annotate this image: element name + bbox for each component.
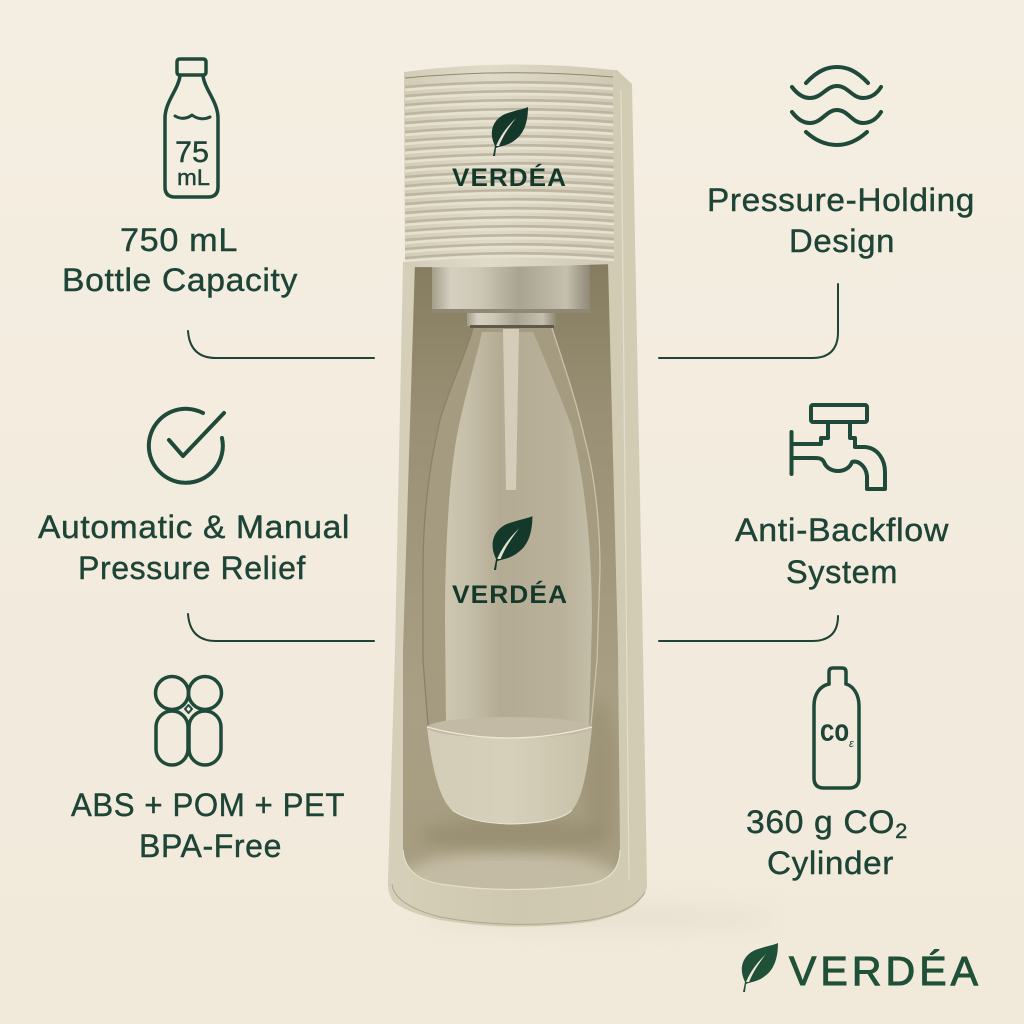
label	[38, 509, 350, 586]
head logo	[452, 107, 567, 192]
label	[707, 182, 975, 259]
label	[71, 787, 345, 864]
label: ABS + POM + PET	[71, 787, 345, 823]
label: BPA-Free	[139, 828, 282, 864]
connector	[188, 331, 374, 358]
wordmark: VERDÉA	[789, 948, 979, 994]
machine body	[388, 70, 647, 927]
collar	[432, 262, 590, 328]
label	[62, 222, 298, 298]
connector	[659, 284, 838, 358]
wordmark: VERDÉA	[452, 580, 568, 609]
label: Automatic & Manual	[38, 509, 350, 545]
bottle	[423, 328, 600, 728]
machine recess	[403, 262, 620, 890]
feature: pressure holding	[707, 67, 975, 259]
leaf	[492, 107, 528, 156]
label: Design	[789, 223, 895, 259]
label: Pressure Relief	[78, 550, 306, 586]
feature: materials	[71, 676, 345, 864]
connector	[188, 614, 374, 641]
icon: faucet	[792, 405, 885, 489]
brand logo	[742, 943, 979, 994]
icon: material pods	[156, 676, 222, 765]
label: 360 g CO	[746, 804, 888, 840]
label: Cylinder	[767, 845, 894, 881]
label: 750 mL	[120, 222, 238, 258]
product: soda machine	[388, 64, 780, 930]
feature: co2 cylinder	[746, 668, 908, 881]
drip cup	[427, 717, 592, 824]
machine head	[404, 64, 614, 267]
icon: bottle: mL	[177, 165, 210, 190]
label: Bottle Capacity	[62, 262, 298, 298]
wordmark: VERDÉA	[452, 163, 567, 192]
icon: check circle	[149, 409, 224, 483]
label	[746, 804, 908, 881]
icon: cylinder	[814, 668, 859, 788]
icon: waves	[792, 67, 881, 145]
feature: anti-backflow	[735, 405, 949, 590]
label: 2	[895, 820, 908, 843]
icon: bottle: 75	[175, 136, 209, 169]
floor shadow	[420, 906, 780, 930]
leaf	[493, 516, 532, 570]
feature: bottle capacity	[62, 59, 298, 298]
leaf	[742, 943, 778, 992]
icon: cylinder: ε	[849, 738, 854, 750]
label: Pressure-Holding	[707, 182, 975, 218]
icon: bottle	[165, 59, 218, 197]
bottle straw	[503, 329, 519, 490]
label: Anti-Backflow	[735, 512, 949, 548]
label	[735, 512, 949, 590]
feature: pressure relief	[38, 409, 350, 586]
connector	[659, 616, 838, 641]
head ribs	[405, 82, 614, 261]
bottle logo	[452, 516, 568, 609]
icon: cylinder: CO	[820, 720, 849, 749]
label: System	[786, 554, 898, 590]
